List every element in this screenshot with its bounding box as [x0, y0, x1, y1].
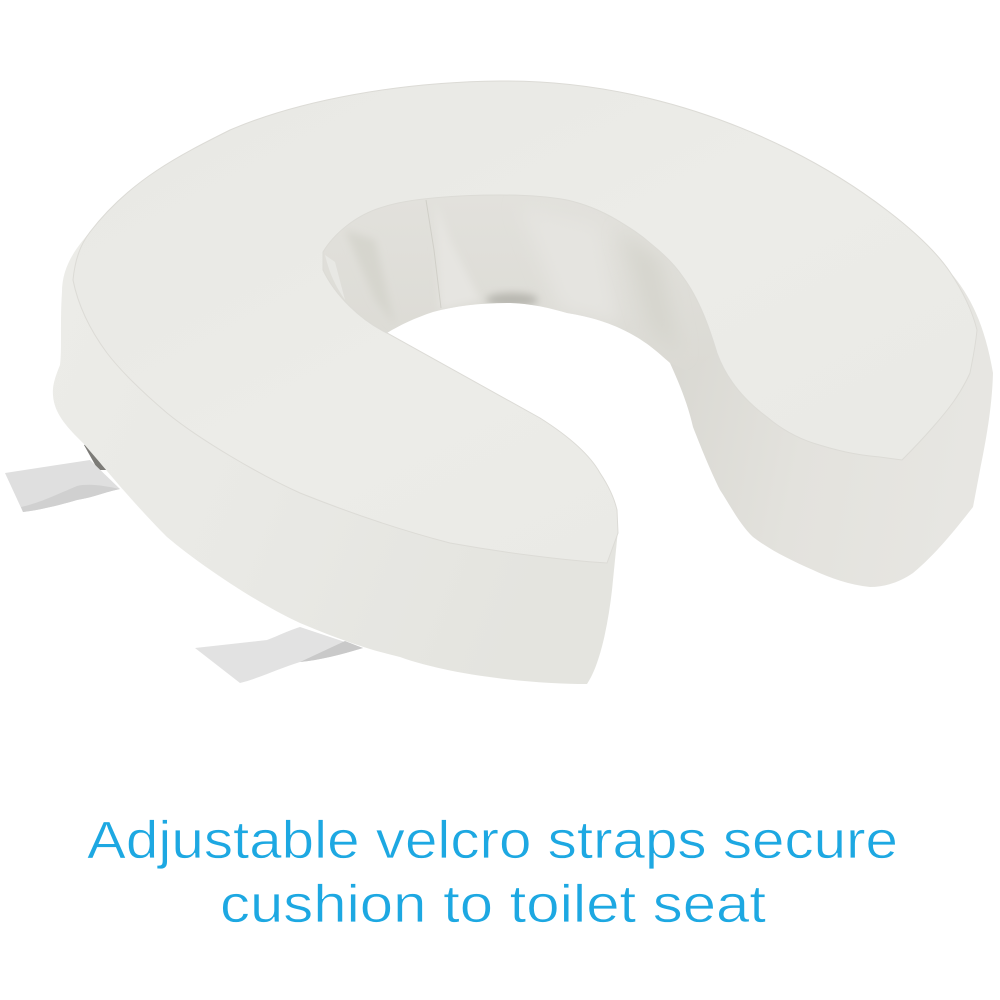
cushion: right arm side wall [670, 272, 993, 587]
cushion: top surface [73, 81, 977, 563]
cushion: hole pleats and shadows [326, 200, 661, 310]
caption: second line: cushion to toilet seat [220, 875, 766, 934]
cushion [53, 81, 993, 684]
cushion: left arm side wall [53, 232, 618, 684]
strap: bottom velcro [195, 627, 363, 683]
cushion: inner hole wall [324, 196, 683, 363]
strap: left velcro [5, 442, 120, 512]
caption: first line: Adjustable velcro straps secure [87, 811, 898, 870]
